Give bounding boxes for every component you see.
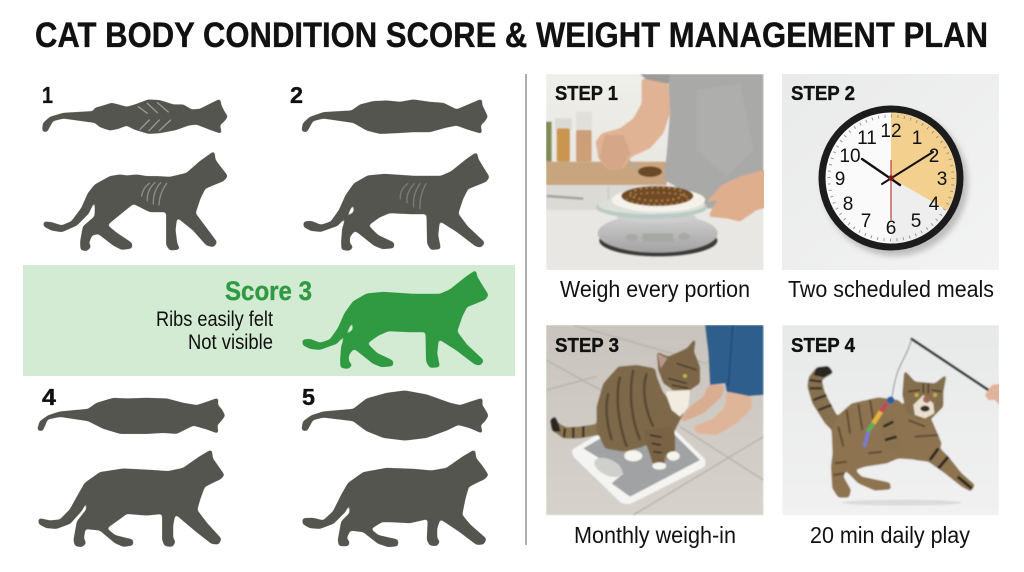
step label: STEP 2: [791, 83, 855, 105]
step label: STEP 3: [555, 335, 619, 357]
photo: wall clock: 11: [857, 128, 877, 149]
panel: step 4: [782, 325, 1005, 548]
icon: ideal weight cat: [303, 271, 488, 368]
photo: wall clock: 1: [912, 128, 922, 149]
score 2: 2: [290, 82, 303, 108]
photo: wall clock: 12: [880, 121, 902, 142]
score 5: [302, 384, 488, 547]
score 1: [42, 82, 227, 251]
score 3 heading: Score 3: [225, 276, 312, 306]
score 2: [290, 82, 489, 250]
panel: body condition scores: [23, 82, 515, 547]
panel: step 1: [546, 74, 770, 302]
photo: wall clock: [782, 74, 999, 270]
photo: wall clock: 8: [843, 194, 853, 215]
caption: Two scheduled meals: [788, 276, 994, 302]
caption: 20 min daily play: [810, 522, 970, 548]
score 1: 1: [42, 82, 53, 108]
step label: STEP 1: [555, 83, 618, 105]
panel: step 2: [782, 74, 999, 302]
score 5: 5: [302, 384, 315, 410]
photo: wall clock: 3: [937, 169, 947, 190]
caption: Monthly weigh-in: [574, 522, 736, 548]
photo: wall clock: 10: [839, 146, 861, 167]
score 4: [38, 384, 225, 547]
photo: wall clock: 4: [929, 194, 940, 215]
score 3 description: Not visible: [188, 331, 273, 354]
photo: weighing kibble: [546, 74, 770, 271]
panel: step 3: [546, 325, 763, 548]
photo: wall clock: 9: [835, 169, 845, 190]
score 3 description: [156, 308, 273, 354]
photo: cat on bathroom scale: [546, 325, 763, 515]
photo: cat playing with wand toy: [782, 325, 1005, 515]
caption: Weigh every portion: [560, 276, 750, 302]
photo: wall clock: 7: [861, 211, 871, 232]
highlighted score 3 band: [23, 265, 515, 376]
photo: wall clock: 5: [911, 211, 921, 232]
step label: STEP 4: [791, 335, 856, 357]
score 3 description: Ribs easily felt: [156, 308, 273, 331]
score 4: 4: [42, 384, 56, 410]
photo: wall clock: 6: [886, 218, 896, 239]
photo: wall clock: 2: [929, 146, 939, 167]
